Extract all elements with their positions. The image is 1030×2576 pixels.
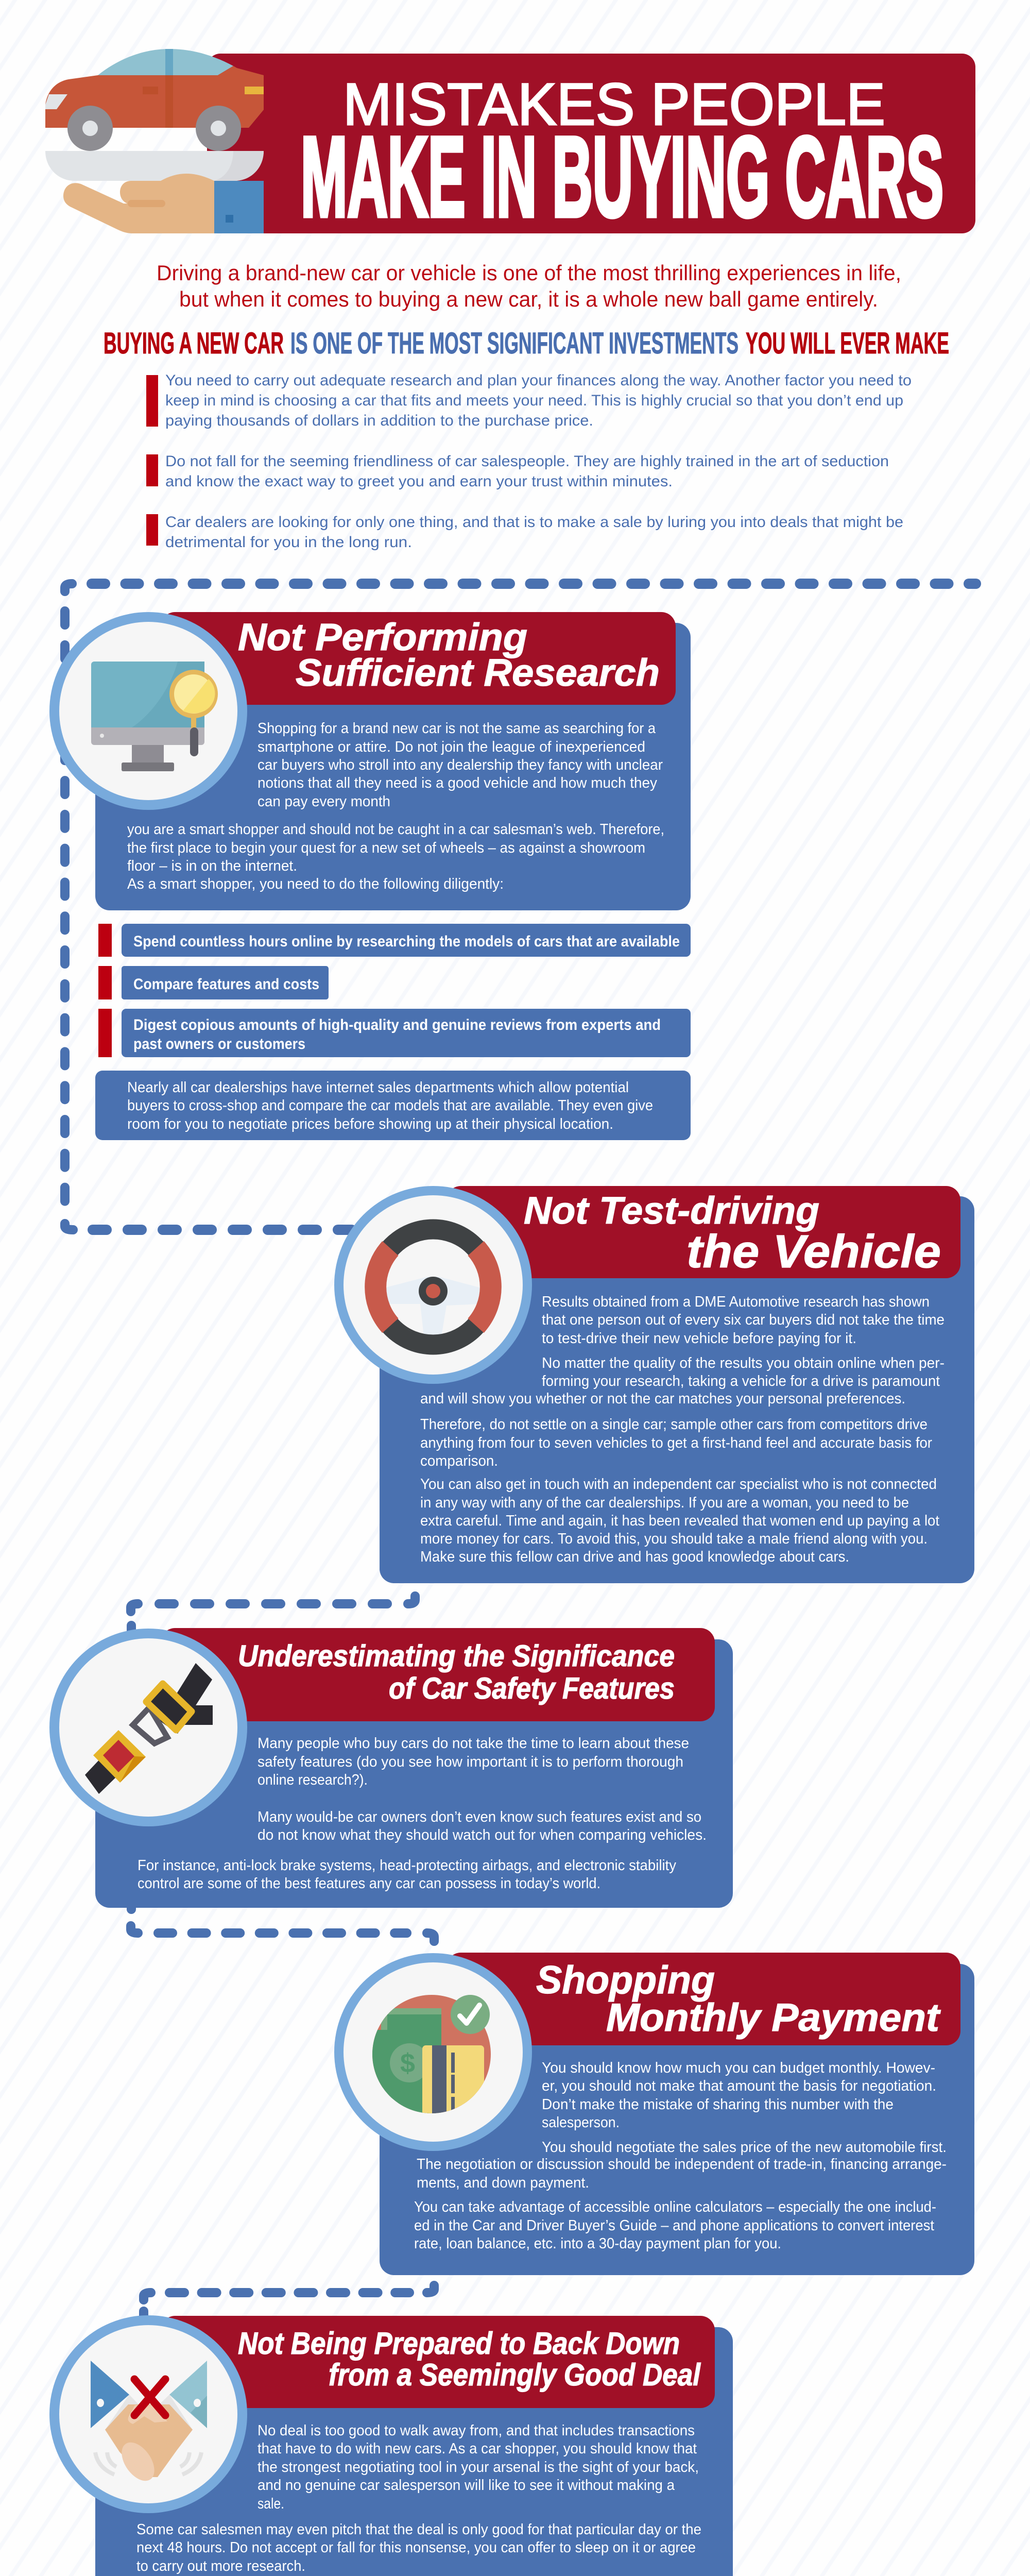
body text: to test-drive their new vehicle before paying for it.: [542, 1330, 856, 1347]
heading: Not Performing: [238, 616, 527, 658]
body text: er, you should not make that amount the basis for negotiation.: [542, 2078, 936, 2094]
intro bullet 1: paying thousands of dollars in addition to the purchase price.: [165, 412, 593, 429]
body text: you are a smart shopper and should not be caught in a car salesman’s web. Therefore,: [127, 821, 664, 838]
heading: Underestimating the Significance: [238, 1639, 675, 1673]
body text: notions that all they need is a good vehicle and how much they: [258, 775, 658, 791]
body text: Many people who buy cars do not take the time to learn about these: [258, 1735, 689, 1752]
body text: next 48 hours. Do not accept or fall for this nonsense, you can offer to sleep on it or agree: [136, 2539, 696, 2556]
research closing note: room for you to negotiate prices before showing up at their physical location.: [127, 1116, 613, 1132]
intro statement: but when it comes to buying a new car, it is a whole new ball game entirely.: [179, 287, 878, 311]
subheading: BUYING A NEW CAR: [104, 327, 284, 360]
research checklist item 2: Compare features and costs: [133, 976, 319, 993]
title line 1: MISTAKES PEOPLE: [343, 72, 885, 138]
body text: salesperson.: [542, 2114, 620, 2131]
body text: For instance, anti-lock brake systems, head-protecting airbags, and electronic stability: [138, 1857, 677, 1874]
body text: extra careful. Time and again, it has been revealed that women end up paying a lot: [420, 1513, 939, 1529]
panel: not being prepared to back down: [49, 2315, 733, 2576]
dashed connector: section 4 to 5: [144, 2285, 434, 2318]
icon: seat belt: [49, 1629, 247, 1826]
heading: [238, 1639, 675, 1705]
intro bullet 2: [146, 453, 889, 490]
body text: rate, loan balance, etc. into a 30-day payment plan for you.: [414, 2235, 781, 2252]
body text: No matter the quality of the results you obtain online when per-: [542, 1355, 945, 1371]
heading: [238, 2326, 701, 2392]
body text: The negotiation or discussion should be independent of trade-in, financing arrange-: [417, 2156, 947, 2173]
body text: Don’t make the mistake of sharing this number with the: [542, 2096, 894, 2113]
panel: not performing sufficient research: [49, 612, 691, 910]
heading: [238, 616, 660, 694]
body text: can pay every month: [258, 793, 390, 810]
body text: sale.: [258, 2496, 284, 2512]
body text: You should know how much you can budget monthly. Howev-: [542, 2060, 935, 2076]
dashed connector: intro to section 2: [65, 584, 976, 1230]
icon: car on a hand: [45, 49, 264, 233]
intro bullet 1: You need to carry out adequate research and plan your finances along the way. Another factor you need to: [165, 372, 912, 389]
body text: [420, 1294, 945, 1565]
body text: the strongest negotiating tool in your arsenal is the sight of your back,: [258, 2459, 699, 2476]
body text: ed in the Car and Driver Buyer’s Guide – and phone applications to convert interest: [414, 2217, 934, 2234]
research checklist item 2: [98, 966, 329, 999]
body text: to carry out more research.: [136, 2558, 305, 2574]
panel: underestimating car safety features: [49, 1628, 733, 1908]
panel: not test-driving the vehicle: [334, 1186, 974, 1583]
body text: Many would-be car owners don’t even know such features exist and so: [258, 1809, 701, 1825]
body text: You should negotiate the sales price of the new automobile first.: [542, 2139, 947, 2156]
body text: that have to do with new cars. As a car shopper, you should know that: [258, 2441, 697, 2457]
body text: As a smart shopper, you need to do the following diligently:: [127, 876, 504, 892]
intro bullet 3: Car dealers are looking for only one thing, and that is to make a sale by luring you into deals that might be: [165, 514, 903, 531]
title banner: [45, 49, 975, 240]
body text: control are some of the best features any car can possess in today’s world.: [138, 1875, 600, 1892]
body text: Make sure this fellow can drive and has good knowledge about cars.: [420, 1549, 849, 1565]
research checklist item 3: Digest copious amounts of high-quality and genuine reviews from experts and: [133, 1016, 661, 1033]
body text: online research?).: [258, 1772, 368, 1788]
body text: comparison.: [420, 1453, 498, 1469]
icon: money and card: $: [400, 2048, 415, 2078]
intro bullet 2: and know the exact way to greet you and earn your trust within minutes.: [165, 473, 673, 490]
research closing note: buyers to cross-shop and compare the car models that are available. They even give: [127, 1097, 653, 1114]
body text: You can also get in touch with an independent car specialist who is not connected: [420, 1476, 937, 1493]
dashed connector: section 3 to 4: [131, 1904, 434, 1941]
heading: Shopping: [536, 1958, 715, 2002]
heading: [536, 1958, 941, 2040]
intro bullet 3: detrimental for you in the long run.: [165, 534, 412, 551]
body text: safety features (do you see how important it is to perform thorough: [258, 1754, 683, 1770]
heading: Not Test-driving: [524, 1189, 819, 1232]
body text: [138, 1735, 707, 1892]
body text: Some car salesmen may even pitch that the deal is only good for that particular day or the: [136, 2521, 701, 2538]
heading: [524, 1189, 941, 1278]
heading: Monthly Payment: [606, 1996, 941, 2040]
body text: Therefore, do not settle on a single car; sample other cars from competitors drive: [420, 1416, 928, 1433]
dashed connector: section 2 to 3: [131, 1596, 415, 1636]
body text: anything from four to seven vehicles to get a first-hand feel and accurate basis for: [420, 1435, 932, 1451]
body text: the first place to begin your quest for a new set of wheels – as against a showroom: [127, 840, 645, 856]
body text: and will show you whether or not the car matches your personal preferences.: [420, 1391, 905, 1407]
body text: and no genuine car salesperson will like to see it without making a: [258, 2477, 675, 2494]
research checklist item 1: Spend countless hours online by researching the models of cars that are available: [133, 933, 680, 950]
research checklist item 3: [98, 1009, 691, 1057]
heading: Sufficient Research: [296, 651, 660, 694]
body text: in any way with any of the car dealerships. If you are a woman, you need to be: [420, 1495, 909, 1511]
subheading: IS ONE OF THE MOST SIGNIFICANT INVESTMENTS: [290, 327, 739, 360]
research checklist item 3: past owners or customers: [133, 1036, 305, 1053]
body text: No deal is too good to walk away from, and that includes transactions: [258, 2422, 695, 2439]
body text: smartphone or attire. Do not join the league of inexperienced: [258, 739, 645, 755]
research checklist item 1: [98, 924, 691, 957]
intro bullet 3: [146, 514, 903, 551]
body text: [136, 2422, 701, 2576]
research closing note: Nearly all car dealerships have internet sales departments which allow potential: [127, 1079, 629, 1096]
intro statement: [157, 261, 901, 311]
heading: Not Being Prepared to Back Down: [238, 2326, 680, 2361]
body text: forming your research, taking a vehicle for a drive is paramount: [542, 1373, 940, 1389]
body text: do not know what they should watch out for when comparing vehicles.: [258, 1827, 707, 1843]
intro bullet 2: Do not fall for the seeming friendliness of car salespeople. They are highly trained in the art of seduction: [165, 453, 889, 470]
research closing note: [95, 1071, 691, 1140]
body text: that one person out of every six car buyers did not take the time: [542, 1312, 945, 1328]
body text: You can take advantage of accessible online calculators – especially the one includ-: [414, 2199, 936, 2215]
body text: more money for cars. To avoid this, you should take a male friend along with you.: [420, 1531, 928, 1547]
body text: Results obtained from a DME Automotive research has shown: [542, 1294, 930, 1310]
intro bullet 1: [146, 372, 912, 429]
body text: floor – is in on the internet.: [127, 858, 297, 874]
body text: [127, 720, 664, 892]
body text: car buyers who stroll into any dealership they fancy with unclear: [258, 757, 663, 773]
body text: ments, and down payment.: [417, 2175, 589, 2191]
heading: from a Seemingly Good Deal: [329, 2358, 701, 2392]
heading: the Vehicle: [686, 1226, 941, 1278]
icon: steering wheel: [334, 1186, 532, 1384]
body text: Shopping for a brand new car is not the same as searching for a: [258, 720, 656, 737]
intro statement: Driving a brand-new car or vehicle is one of the most thrilling experiences in life,: [157, 261, 901, 285]
icon: handshake with red cross: [49, 2315, 247, 2513]
intro bullet 1: keep in mind is choosing a car that fits and meets your need. This is highly crucial so that you don’t end up: [165, 392, 903, 409]
heading: of Car Safety Features: [389, 1672, 675, 1705]
icon: money and card: [334, 1953, 532, 2151]
body text: [414, 2060, 947, 2252]
icon: monitor with magnifier: [49, 612, 247, 810]
panel: shopping monthly payment: [334, 1953, 974, 2275]
